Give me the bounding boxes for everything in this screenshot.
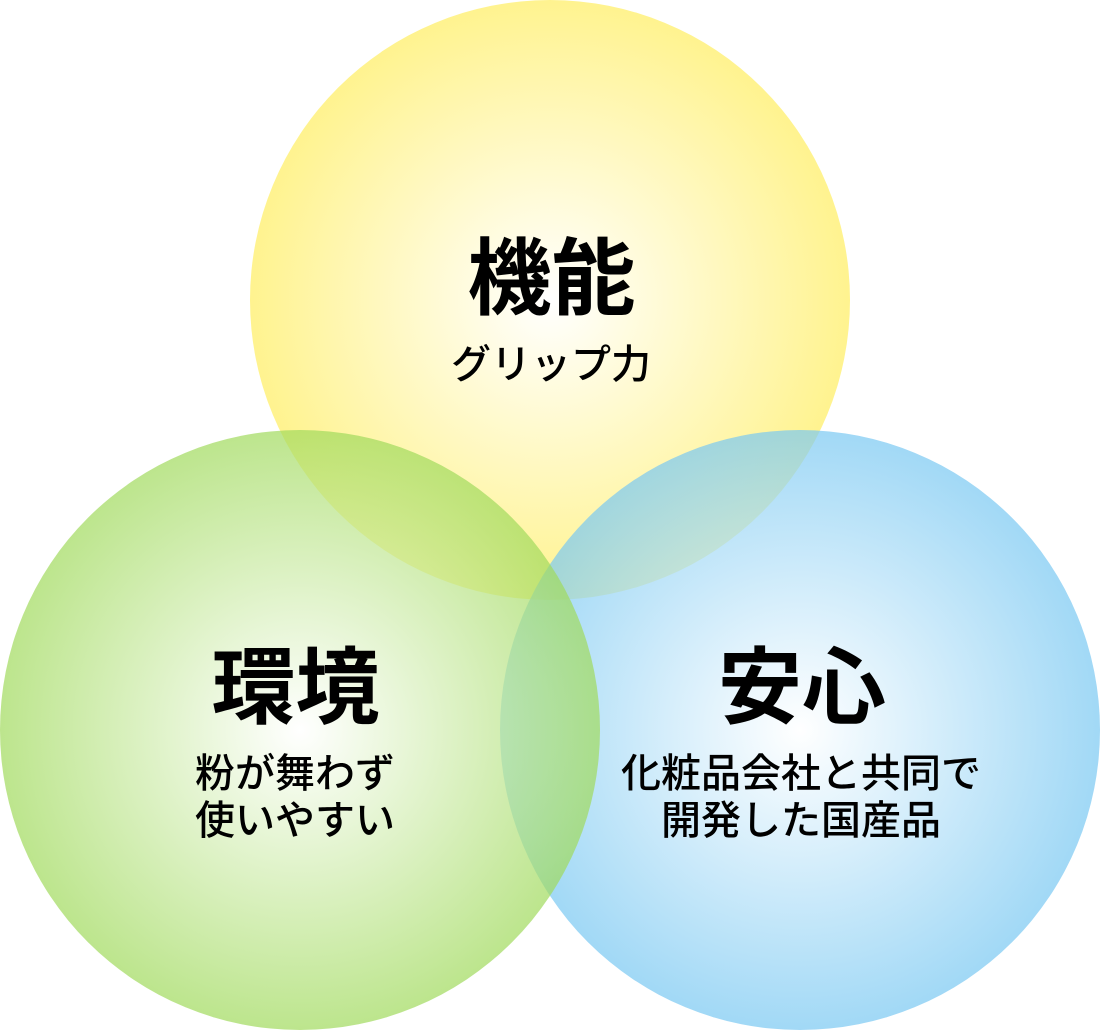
circle: 安心 blue (500, 430, 1100, 1030)
circle: 環境 green (0, 430, 600, 1030)
subtext: グリップ力: グリップ力 (451, 343, 651, 387)
subtext: 粉が舞わず 使いやすい: 粉が舞わず (195, 752, 395, 796)
heading: 環境: 環境 (211, 641, 380, 735)
heading: 機能: 機能 (467, 232, 636, 326)
subtext: 化粧品会社と共同で 開発した国産品: 開発した国産品 (661, 799, 941, 843)
subtext: 粉が舞わず 使いやすい: 使いやすい (195, 799, 395, 843)
heading: 安心: 安心 (718, 641, 886, 735)
subtext: 化粧品会社と共同で 開発した国産品 (621, 752, 981, 843)
subtext: 化粧品会社と共同で 開発した国産品: 化粧品会社と共同で (621, 752, 981, 796)
circle: 機能 yellow (250, 0, 850, 600)
subtext: 粉が舞わず 使いやすい (195, 752, 395, 843)
